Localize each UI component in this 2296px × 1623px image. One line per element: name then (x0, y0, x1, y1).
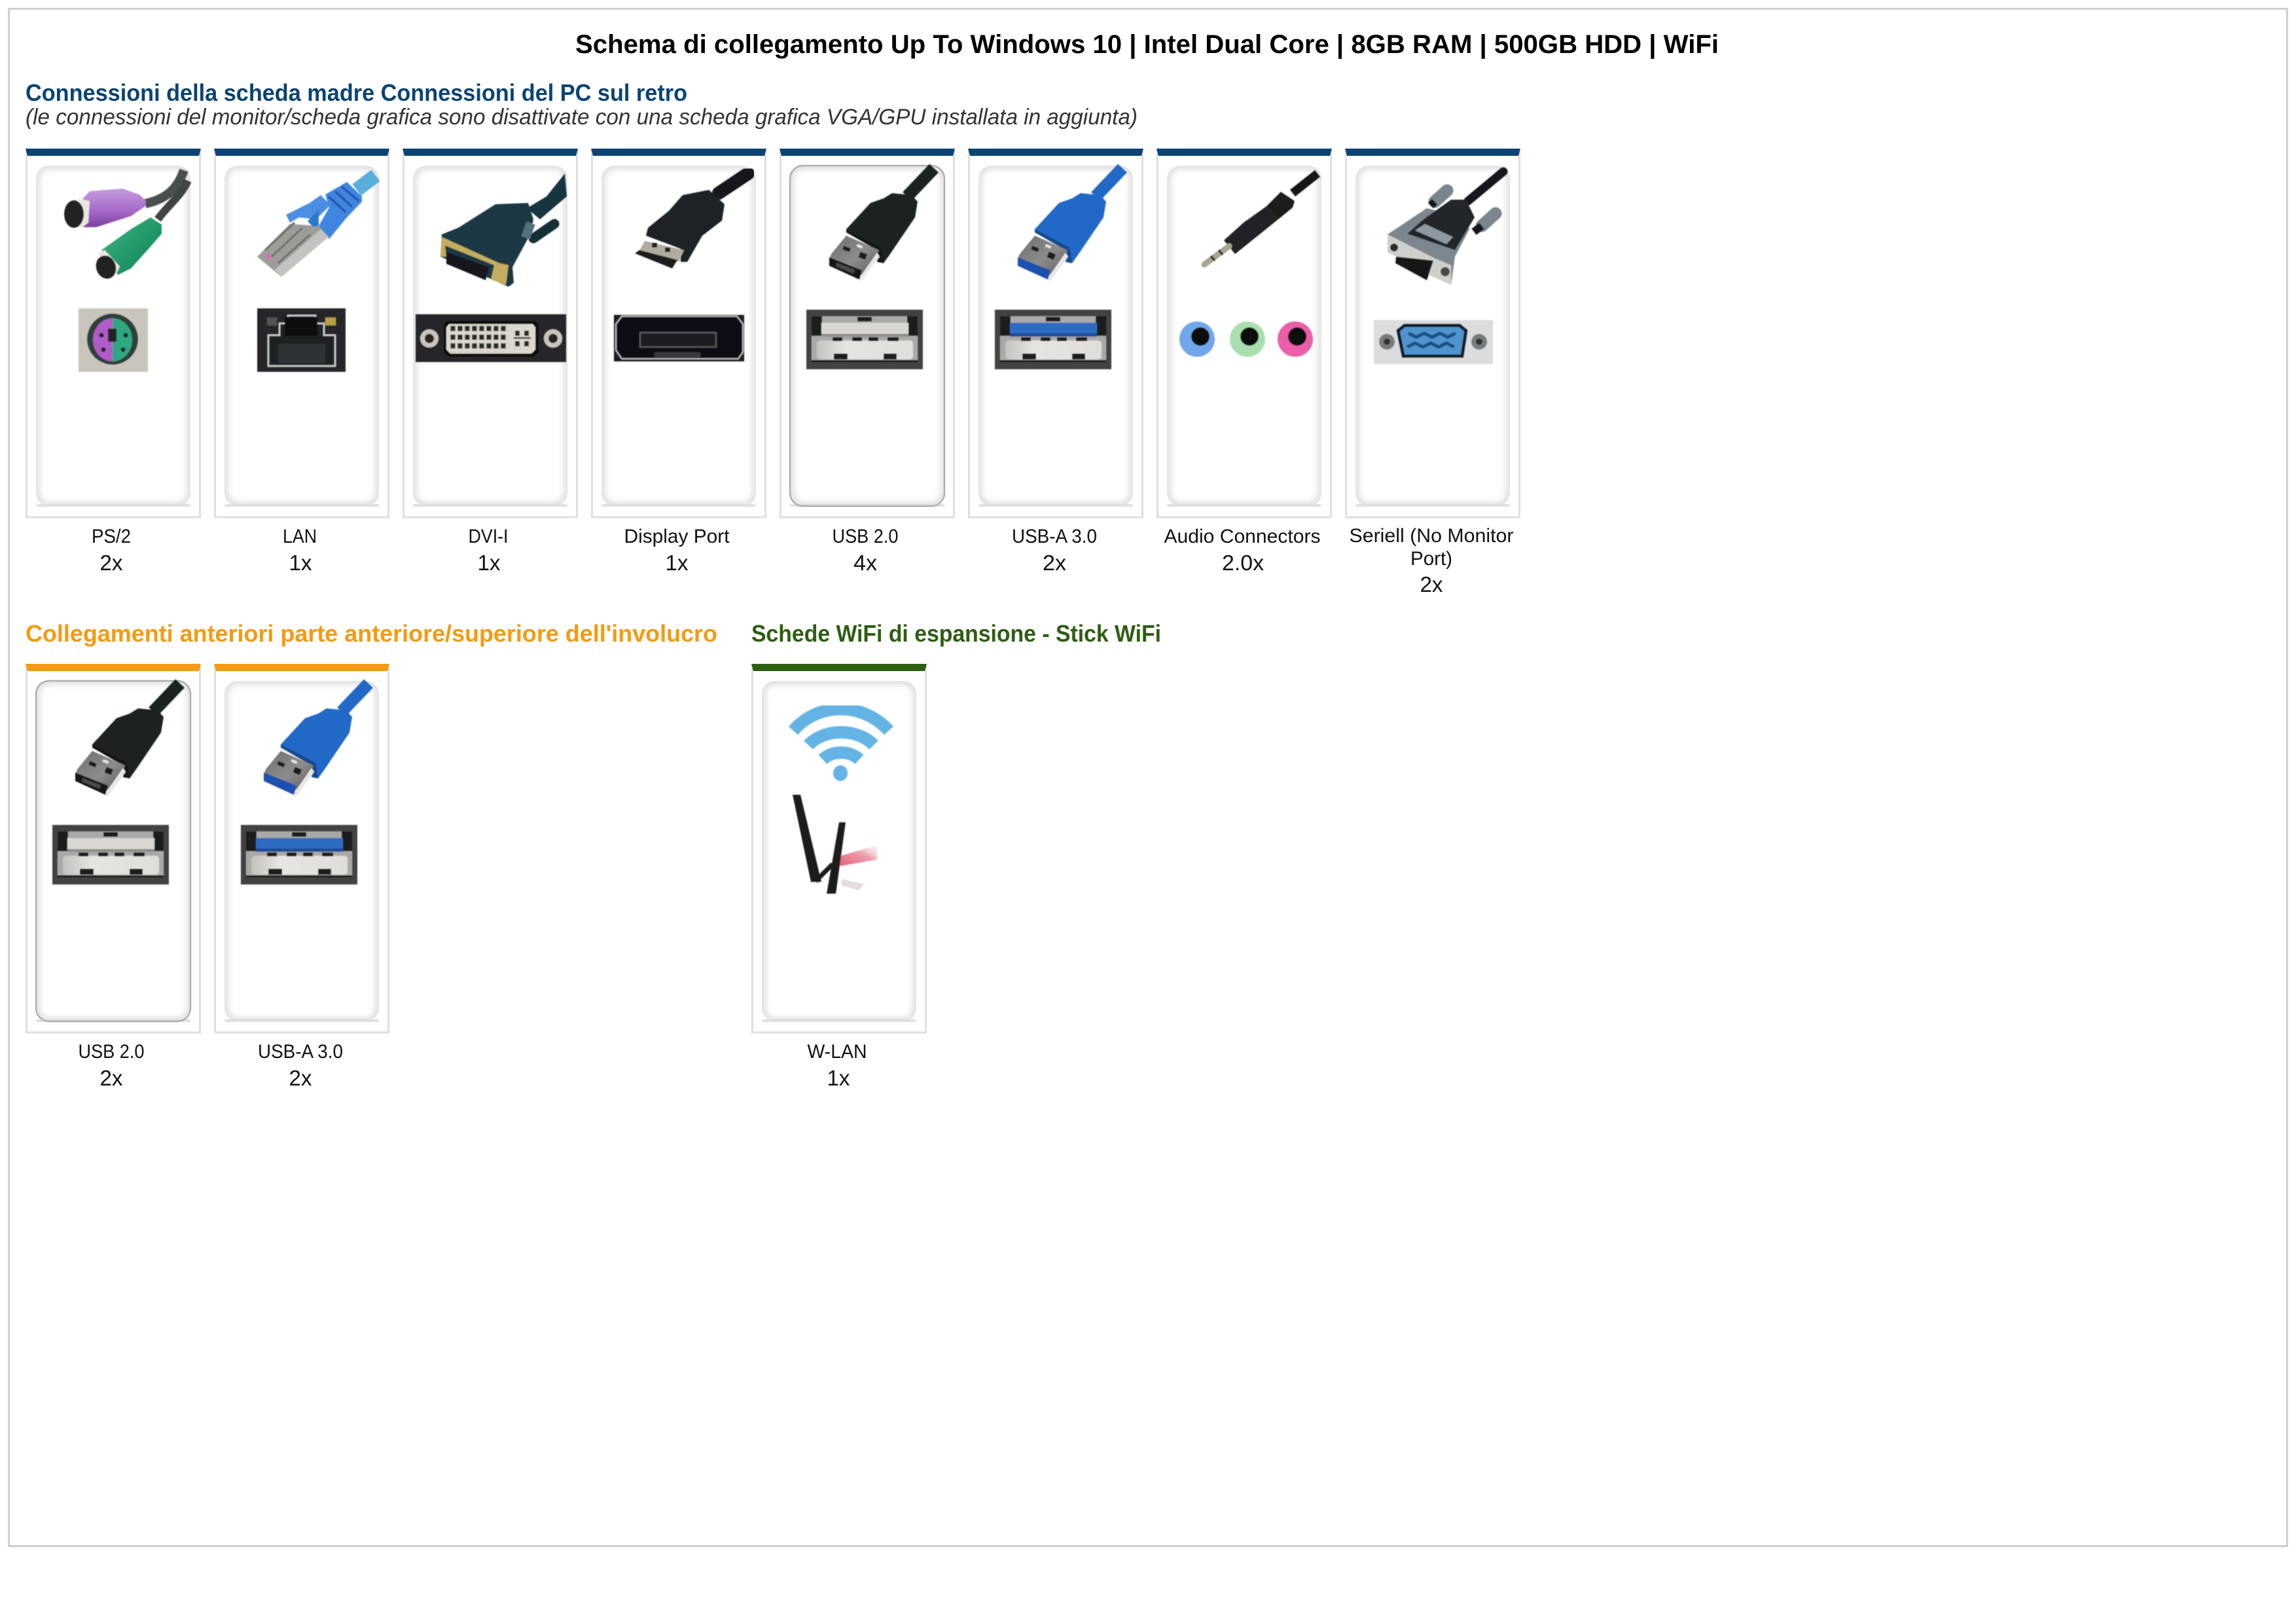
icon: DVI port (416, 314, 566, 362)
count: 1x (827, 1066, 850, 1090)
section heading: rear connections: Connessioni della scheda madre Connessioni del PC sul retro (26, 79, 687, 106)
icon: serial port (1374, 320, 1493, 364)
icon: USB 3.0 plug (1018, 168, 1122, 282)
icon: USB 2.0 port (52, 825, 169, 884)
label: DVI-I (469, 526, 508, 547)
panel: Display Port (591, 149, 766, 575)
label: USB-A 3.0 (258, 1041, 343, 1063)
label: Seriell (No Monitor (1350, 525, 1513, 547)
count: 1x (665, 551, 689, 575)
panel: PS/2 (26, 149, 201, 575)
icon: USB 2.0 plug (829, 168, 934, 282)
panel: USB 2.0 (780, 149, 955, 575)
icon: USB 2.0 port (806, 310, 923, 369)
label: PS/2 (92, 526, 131, 547)
label line 2: Port) (1410, 548, 1452, 570)
count: 2x (99, 1066, 123, 1090)
label: USB-A 3.0 (1012, 526, 1097, 547)
count: 2x (1043, 551, 1067, 575)
panel: W-LAN (751, 664, 927, 1090)
count: 2x (99, 551, 123, 575)
icon: audio ports (1179, 321, 1313, 357)
icon: PS/2 cable (64, 170, 188, 282)
label: USB 2.0 (79, 1041, 144, 1063)
label: USB 2.0 (833, 526, 898, 547)
icon: audio jack (1204, 173, 1318, 264)
icon: serial cable (1388, 172, 1503, 285)
count: 2.0x (1222, 551, 1265, 575)
icon: DisplayPort port (614, 315, 744, 361)
icon: USB 2.0 plug (75, 684, 180, 797)
title: Schema di collegamento Up To Windows 10 | Intel Dual Core | 8GB RAM | 500GB HDD | WiFi (575, 30, 1719, 59)
icon: LAN cable (257, 175, 376, 277)
count: 2x (289, 1066, 312, 1090)
panel: LAN (214, 149, 389, 575)
label: LAN (283, 526, 317, 547)
label: Display Port (624, 526, 730, 547)
count: 4x (853, 551, 878, 575)
label: Audio Connectors (1164, 526, 1321, 547)
section note: (le connessioni del monitor/scheda grafica sono disattivate con una scheda grafica VGA/GPU installata in aggiunta) (26, 105, 1138, 130)
icon: DisplayPort cable (635, 173, 748, 268)
icon: USB 3.0 plug (264, 684, 368, 797)
panel: front USB 2.0 (26, 664, 201, 1090)
section heading: WiFi: Schede WiFi di espansione - Stick WiFi (751, 620, 1161, 647)
panel: USB-A 3.0 (968, 149, 1143, 575)
panel: Audio Connectors (1157, 149, 1332, 575)
panel: front USB-A 3.0 (214, 664, 389, 1090)
icon: PS/2 port (79, 308, 148, 372)
count: 1x (289, 551, 312, 575)
label: W-LAN (808, 1041, 867, 1063)
count: 1x (478, 551, 501, 575)
panel: Seriell (1345, 149, 1520, 596)
icon: WiFi card with antennas (793, 795, 877, 894)
count: 2x (1420, 572, 1443, 596)
icon: USB 3.0 port (995, 310, 1111, 369)
icon: LAN port (257, 308, 346, 372)
icon: DVI cable (440, 173, 567, 287)
icon: WiFi symbol (793, 709, 889, 781)
panel: DVI-I (403, 149, 578, 575)
section heading: front connections: Collegamenti anteriori parte anteriore/superiore dell'involucro (26, 620, 717, 647)
icon: USB 3.0 port (241, 825, 357, 884)
